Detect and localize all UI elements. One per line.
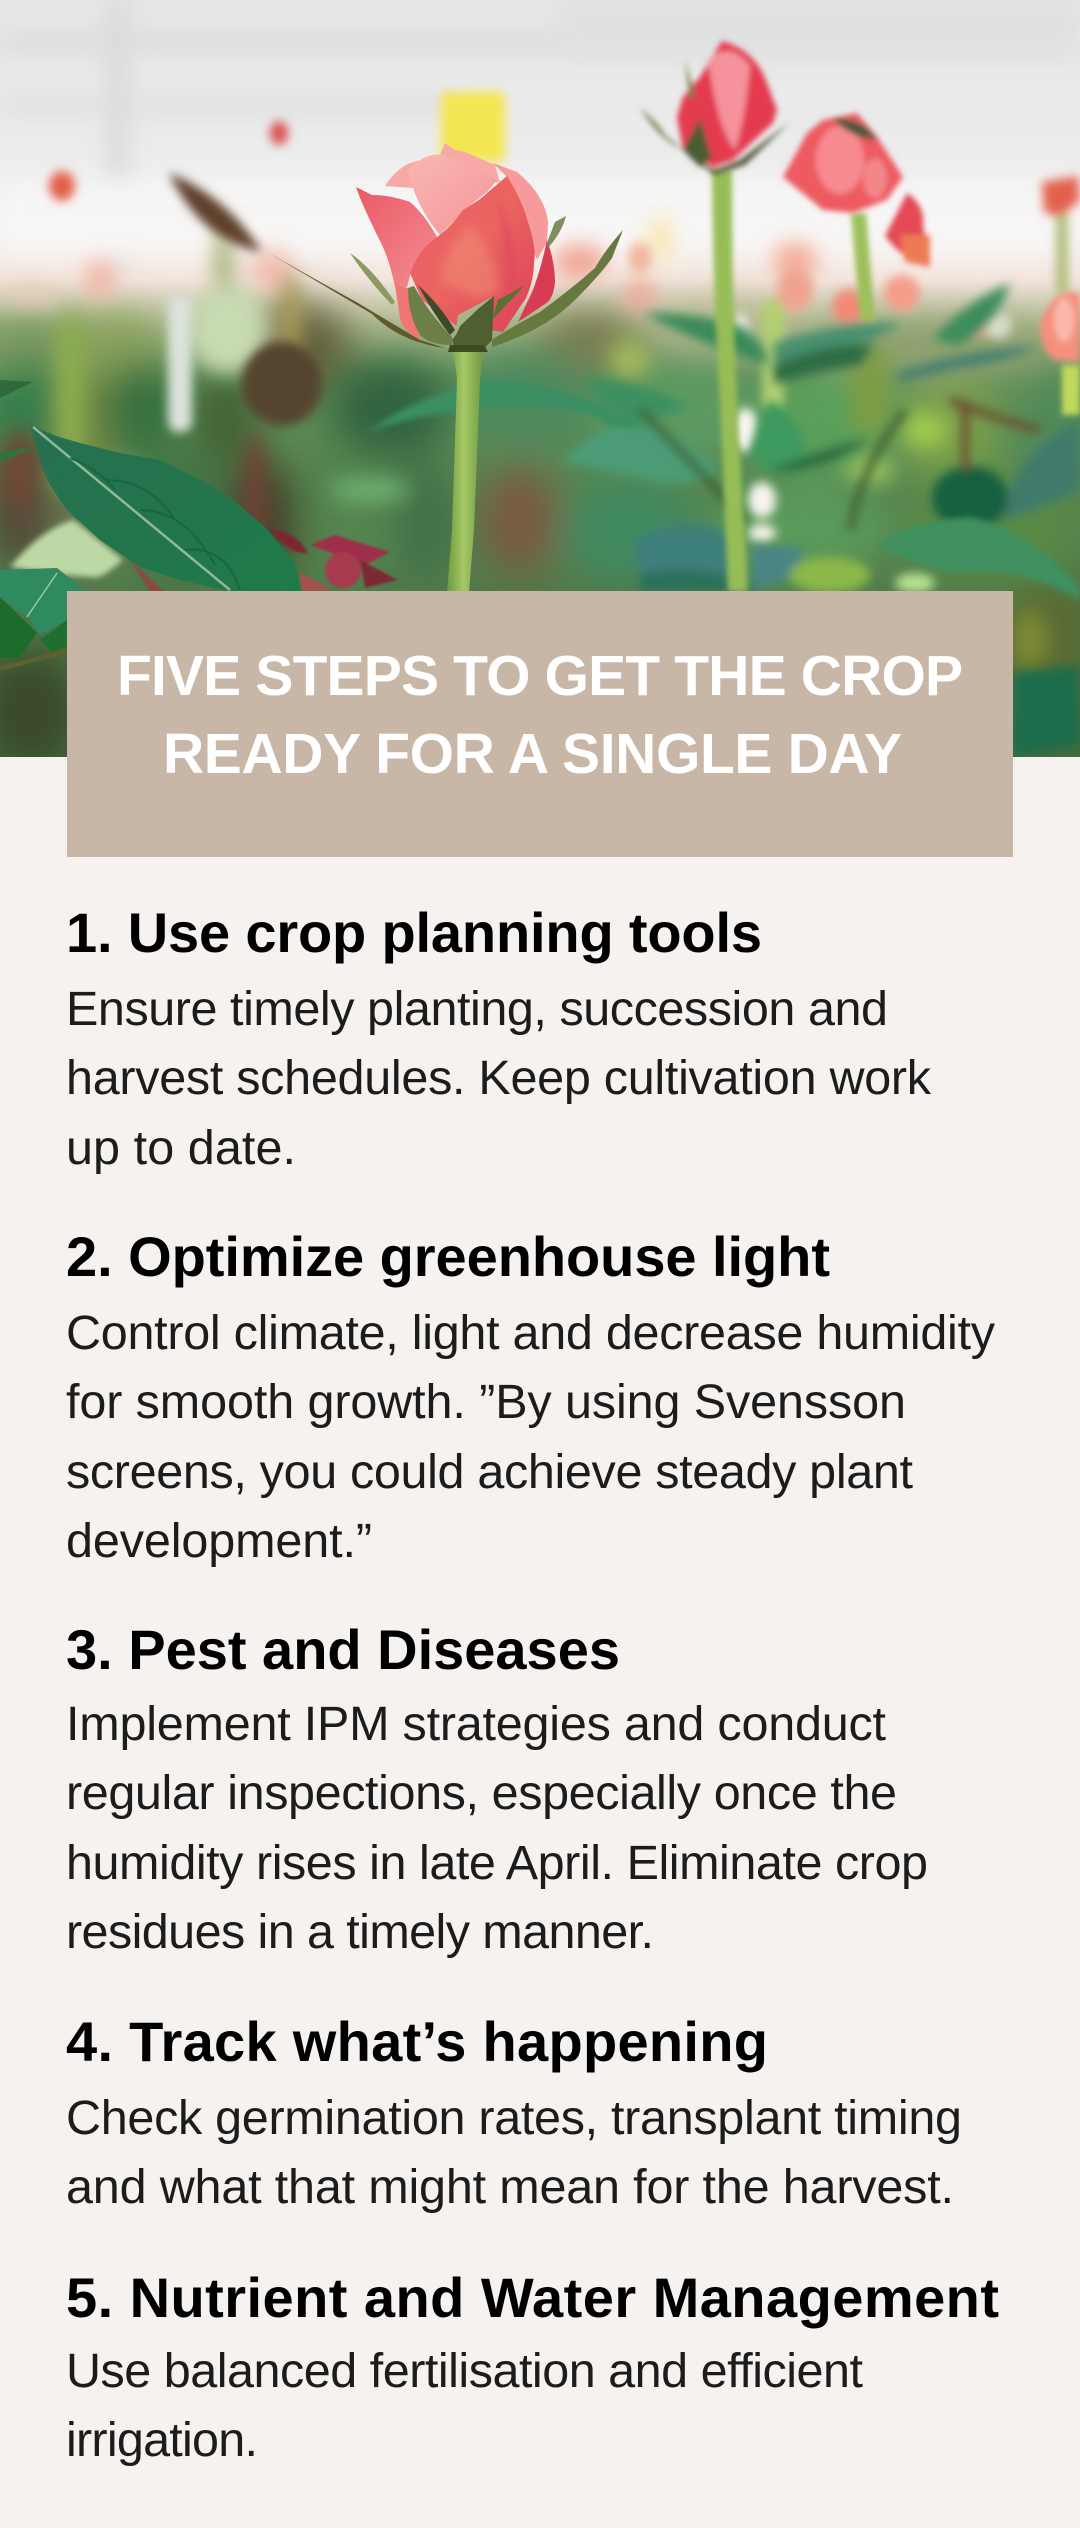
blurred far rose, upper right [1042,176,1080,295]
front large petal [410,176,535,332]
dark red young shoots [130,530,398,592]
step 2 text: development.” [66,1514,372,1568]
step 3 text [66,1697,928,1959]
rear light petal [408,155,497,235]
step 2 [66,1225,996,1568]
light blurred leaf, lower left [10,520,123,577]
step 4 text: and what that might mean for the harvest. [66,2160,954,2214]
right long sepal [492,230,623,347]
foreground leaf behind main stem [367,380,640,432]
main rose stem [447,345,484,592]
back right petal [493,163,548,260]
step 5 [66,2266,999,2467]
step 2 text: screens, you could achieve steady plant [66,1445,914,1499]
photo background: greenhouse roof and blurred foliage [0,0,1080,770]
sharper blurred leaf, lower right [877,517,1080,600]
step 3 text: Implement IPM strategies and conduct [66,1697,887,1751]
step 5 text: irrigation. [66,2413,258,2467]
rose bud: top centre [640,41,790,175]
step 1 heading: 1. Use crop planning tools [66,901,762,964]
step 2 text: for smooth growth. ”By using Svensson [66,1375,906,1429]
step 2 text: Control climate, light and decrease humidity [66,1306,996,1360]
title: READY FOR A SINGLE DAY [163,722,902,786]
left petal [356,187,437,287]
step 4 text [66,2091,962,2214]
front serrated leaf [30,425,302,592]
blurred pink rose, right edge [1040,292,1080,415]
step 3 [66,1618,928,1959]
blurred rose stem, centre right [712,170,875,592]
title banner [67,591,1013,857]
step 2 heading: 2. Optimize greenhouse light [66,1225,830,1288]
title [117,644,963,786]
blurred mid-ground leaves [561,283,1080,757]
step 4 heading: 4. Track what’s happening [66,2010,768,2073]
step 3 heading: 3. Pest and Diseases [66,1618,620,1681]
step 5 text [66,2344,864,2467]
step 1 text [66,982,932,1175]
step 3 text: regular inspections, especially once the [66,1766,897,1820]
top folded petals [385,143,500,190]
title: FIVE STEPS TO GET THE CROP [117,644,963,708]
rose bud: right [783,113,930,267]
step 2 text [66,1306,996,1568]
step 1 text: harvest schedules. Keep cultivation work [66,1051,932,1105]
right dark petal [518,240,555,322]
centre sepals [408,286,452,345]
photo: rose greenhouse [0,0,1080,770]
step 1 text: Ensure timely planting, succession and [66,982,888,1036]
step 4 [66,2010,962,2214]
lower-left leaves [0,380,87,668]
small right sepal [548,216,566,248]
lower left petal [395,285,420,340]
step 4 text: Check germination rates, transplant timing [66,2091,962,2145]
step 5 text: Use balanced fertilisation and efficient [66,2344,864,2398]
left long sepal [267,252,445,348]
step 1 [66,901,932,1175]
step 5 heading: 5. Nutrient and Water Management [66,2266,999,2329]
step 1 text: up to date. [66,1121,296,1175]
step 3 text: humidity rises in late April. Eliminate crop [66,1836,928,1890]
main rose bud [267,143,623,352]
step 3 text: residues in a timely manner. [66,1905,654,1959]
